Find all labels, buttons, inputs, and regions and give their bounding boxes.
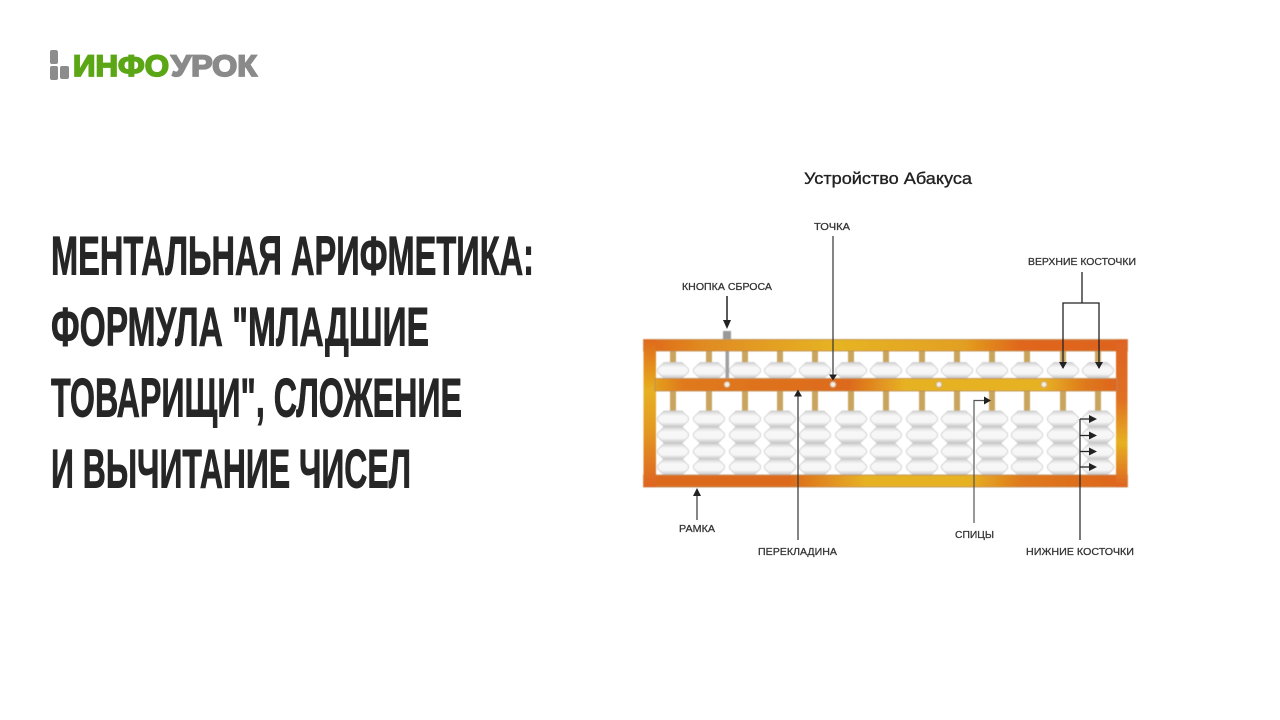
logo wordmark grey: УРОК [171,50,258,83]
title: И ВЫЧИТАНИЕ ЧИСЕЛ [51,438,411,500]
callout: спицы: СПИЦЫ [955,530,994,541]
lower beads [658,411,1114,475]
callout: точка [814,222,850,380]
callout: верхние косточки: ВЕРХНИЕ КОСТОЧКИ [1028,257,1136,268]
icon: logo blocks [50,50,69,80]
callout: точка: ТОЧКА [814,222,850,233]
callout: кнопка сброса [682,282,772,329]
callout: спицы [955,396,994,541]
callout: перекладина: ПЕРЕКЛАДИНА [758,547,837,558]
callout: рамка [679,488,715,535]
callout: перекладина [758,390,837,558]
reset button [723,331,731,378]
title: ТОВАРИЩИ", СЛОЖЕНИЕ [51,366,462,428]
diagram heading: Устройство Абакуса [804,169,973,188]
beam dots [724,382,1047,387]
title: ФОРМУЛА "МЛАДШИЕ [51,296,429,358]
logo wordmark: ИНФО [73,50,169,83]
title: МЕНТАЛЬНАЯ АРИФМЕТИКА: [51,224,534,286]
upper beads [658,362,1114,378]
callout: верхние косточки [1028,257,1136,369]
frame [644,340,1128,487]
title [51,224,534,500]
callout: рамка: РАМКА [679,524,715,535]
logo [50,50,258,83]
callout: нижние косточки [1026,415,1134,558]
callout: нижние косточки: НИЖНИЕ КОСТОЧКИ [1026,547,1134,558]
callout: кнопка сброса: КНОПКА СБРОСА [682,282,772,293]
rods [673,351,1098,412]
abacus diagram [644,331,1128,487]
